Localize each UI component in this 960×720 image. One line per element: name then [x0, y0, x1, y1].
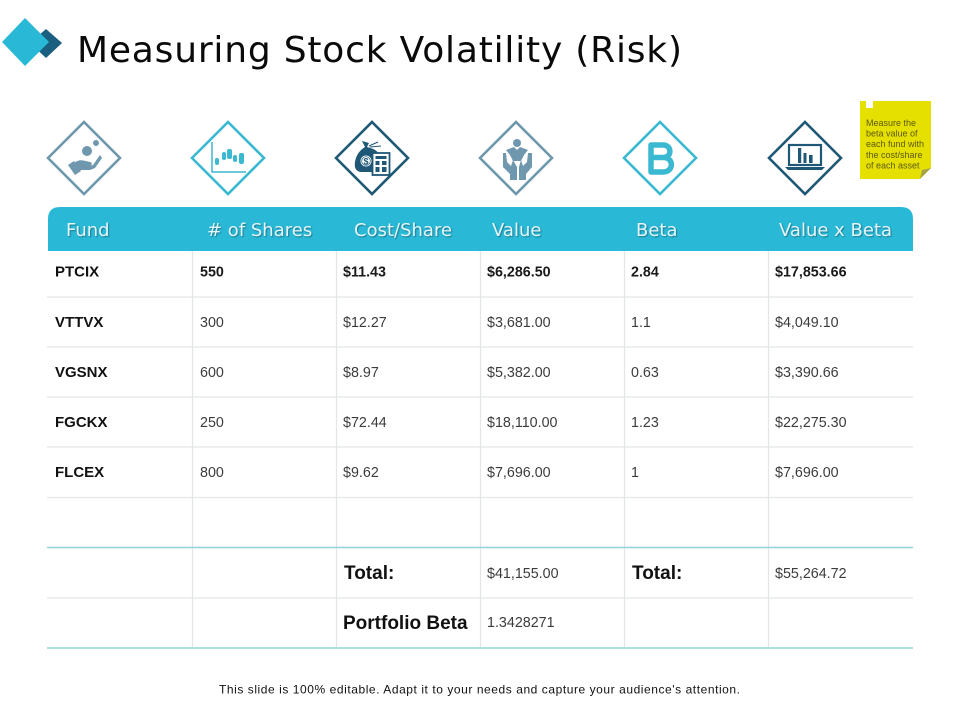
- row: VTTVX: $3,681.00: [487, 315, 551, 331]
- row: FLCEX: $7,696.00: [487, 465, 551, 481]
- sticky note text: of each asset: [866, 160, 920, 170]
- row: FLCEX: 1: [631, 465, 639, 481]
- row: FGCKX: $72.44: [343, 415, 387, 431]
- row: VGSNX: 600: [200, 365, 224, 381]
- row: VGSNX: $5,382.00: [487, 365, 551, 381]
- row: VTTVX: 300: [200, 315, 224, 331]
- table header: Fund: [66, 220, 110, 241]
- row: PTCIX: [55, 264, 847, 280]
- row: PTCIX: PTCIX: [55, 264, 99, 280]
- icon: money bag and calculator: [336, 122, 408, 194]
- row: FLCEX: $7,696.00: [775, 465, 839, 481]
- sticky note text: Measure the: [866, 118, 916, 128]
- logo: overlapping diamonds: [2, 18, 62, 66]
- row: VTTVX: [55, 314, 839, 331]
- row: PTCIX: $11.43: [343, 264, 386, 280]
- icon: money bag and calculator: $: [363, 156, 369, 166]
- row: FGCKX: [55, 414, 847, 431]
- row: VGSNX: $3,390.66: [775, 365, 839, 381]
- row: portfolio beta: 1.3428271: [487, 615, 555, 631]
- row: VGSNX: [55, 364, 839, 381]
- row: VGSNX: 0.63: [631, 365, 659, 381]
- row: VTTVX: $12.27: [343, 315, 387, 331]
- row: VTTVX: VTTVX: [55, 314, 103, 331]
- row: FLCEX: 800: [200, 465, 224, 481]
- row: VGSNX: VGSNX: [55, 364, 108, 381]
- row: totals: [344, 563, 847, 584]
- icon: candlestick chart: [192, 122, 264, 194]
- row: FGCKX: 1.23: [631, 415, 659, 431]
- table header: # of Shares: [207, 220, 312, 241]
- row: VGSNX: $8.97: [343, 365, 379, 381]
- title: Measuring Stock Volatility (Risk): [77, 30, 682, 71]
- sticky note text: each fund with: [866, 139, 924, 149]
- footer note: This slide is 100% editable. Adapt it to your needs and capture your audience's attention.: [219, 682, 740, 696]
- sticky note text: beta value of: [866, 128, 918, 138]
- row: VTTVX: $4,049.10: [775, 315, 839, 331]
- row: totals: Total:: [632, 563, 682, 584]
- row: VTTVX: 1.1: [631, 315, 651, 331]
- table grid: [47, 251, 913, 648]
- row: totals: Total:: [344, 563, 394, 584]
- row: totals: $55,264.72: [775, 566, 847, 582]
- table header: Beta: [636, 220, 678, 241]
- row: FGCKX: FGCKX: [55, 414, 108, 431]
- row: PTCIX: $6,286.50: [487, 264, 551, 280]
- sticky note: [860, 100, 931, 179]
- row: portfolio beta: Portfolio Beta: [343, 613, 468, 634]
- sticky note text: the cost/share: [866, 150, 923, 160]
- row: PTCIX: 550: [200, 264, 224, 280]
- row: FLCEX: [55, 464, 839, 481]
- icon: beta letter: [624, 122, 696, 194]
- table header: [48, 207, 913, 251]
- icon: hand holding coins: [48, 122, 120, 194]
- row: portfolio beta: [343, 613, 555, 634]
- icon: hands holding box: [480, 122, 552, 194]
- icon: laptop with bar chart: [769, 122, 841, 194]
- row: PTCIX: 2.84: [631, 264, 659, 280]
- row: FGCKX: $18,110.00: [487, 415, 558, 431]
- row: FLCEX: FLCEX: [55, 464, 104, 481]
- row: PTCIX: $17,853.66: [775, 264, 847, 280]
- row: totals: $41,155.00: [487, 566, 559, 582]
- table header: Value: [492, 220, 541, 241]
- row: FLCEX: $9.62: [343, 465, 379, 481]
- table header: Value x Beta: [779, 220, 892, 241]
- table header: Cost/Share: [354, 220, 452, 241]
- row: FGCKX: 250: [200, 415, 224, 431]
- row: FGCKX: $22,275.30: [775, 415, 847, 431]
